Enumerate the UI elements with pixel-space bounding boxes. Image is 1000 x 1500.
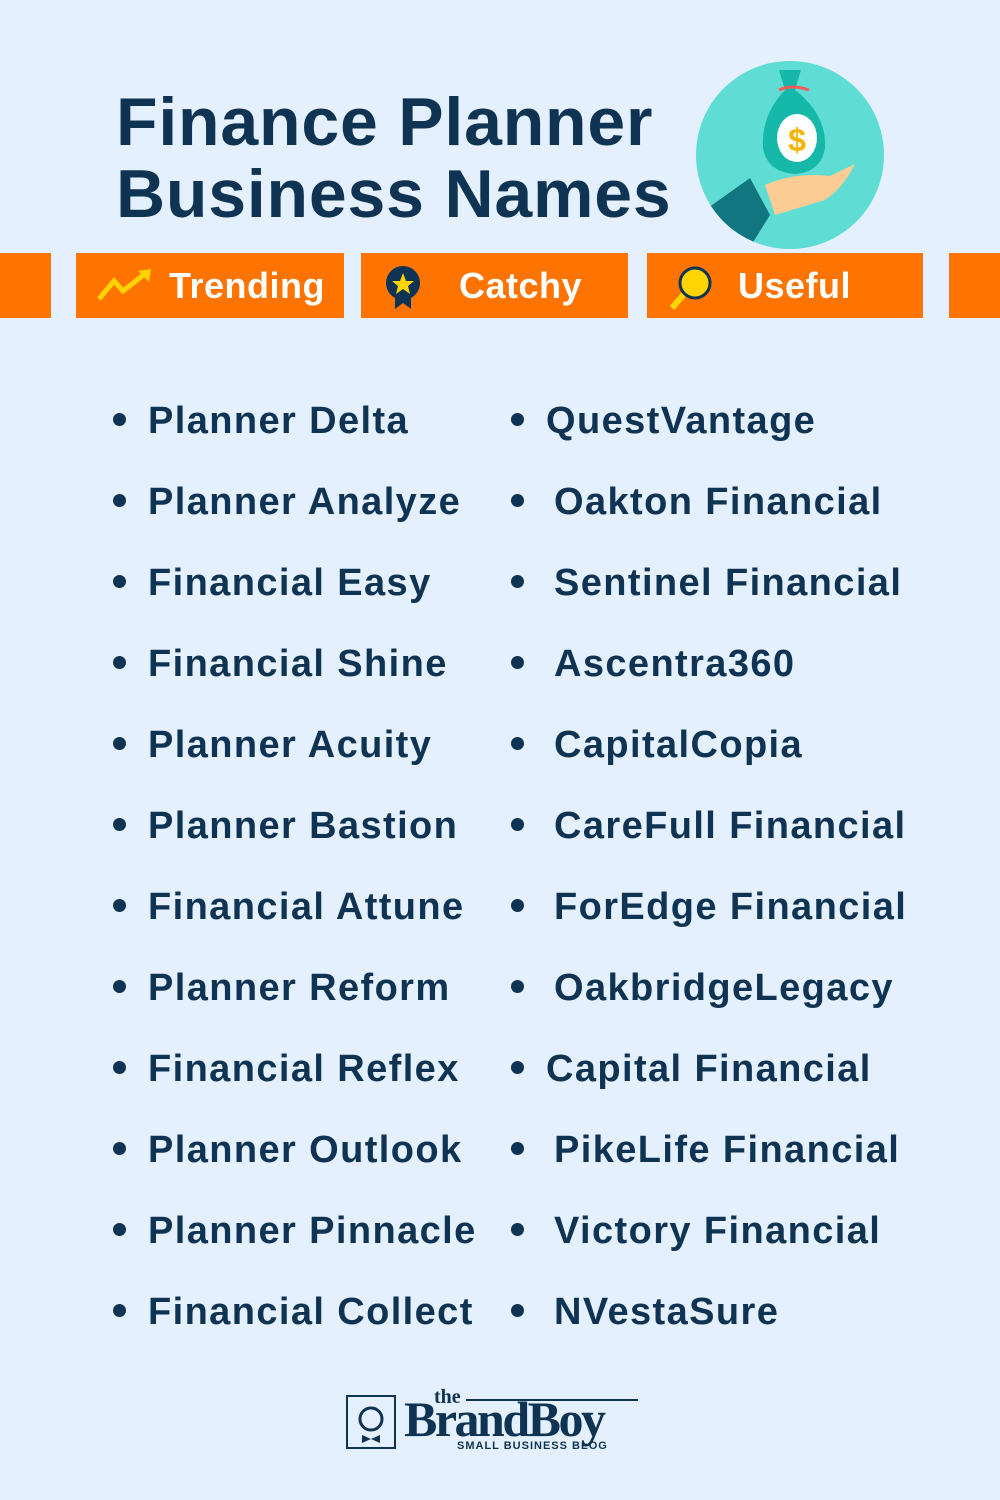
- tab: useful: Useful: [738, 265, 851, 306]
- list: left column: Planner Analyze: [148, 481, 461, 523]
- logo: the BrandBoy: the: [434, 1386, 461, 1408]
- list: left column: Planner Bastion: [148, 805, 458, 847]
- tab: useful: [647, 253, 923, 318]
- list: left column: Planner Acuity: [148, 724, 432, 766]
- list: right column: [511, 400, 907, 1333]
- list: left column: [113, 400, 477, 1333]
- list: left column: Planner Outlook: [148, 1129, 462, 1171]
- list: right column: ForEdge Financial: [554, 886, 907, 928]
- list: right column: QuestVantage: [546, 400, 816, 442]
- list: right column: NVestaSure: [554, 1291, 779, 1333]
- tab: catchy: [361, 253, 628, 318]
- tab: trending: [76, 253, 344, 318]
- title: Finance Planner: [116, 84, 653, 160]
- icon: money bag in hand: $: [788, 122, 806, 158]
- logo: the BrandBoy: [346, 1386, 638, 1452]
- list: left column: Financial Shine: [148, 643, 448, 685]
- list: left column: Financial Easy: [148, 562, 432, 604]
- list: right column: CapitalCopia: [554, 724, 803, 766]
- tab: right edge: [949, 253, 1000, 318]
- tab: left edge: [0, 253, 51, 318]
- list: right column: Ascentra360: [554, 643, 795, 685]
- list: right column: Victory Financial: [554, 1210, 881, 1252]
- list: left column: Planner Pinnacle: [148, 1210, 477, 1252]
- list: left column: Planner Delta: [148, 400, 409, 442]
- list: left column: Planner Reform: [148, 967, 451, 1009]
- list: right column: Capital Financial: [546, 1048, 872, 1090]
- list: left column: Financial Attune: [148, 886, 465, 928]
- tab: catchy: Catchy: [459, 265, 582, 306]
- list: right column: CareFull Financial: [554, 805, 907, 847]
- list: right column: OakbridgeLegacy: [554, 967, 894, 1009]
- logo: the BrandBoy: BrandBoy: [404, 1391, 604, 1447]
- title: Business Names: [116, 156, 671, 232]
- list: left column: Financial Reflex: [148, 1048, 460, 1090]
- list: left column: Financial Collect: [148, 1291, 474, 1333]
- list: right column: Sentinel Financial: [554, 562, 902, 604]
- icon: money bag in hand: [696, 61, 884, 249]
- tab: trending: Trending: [169, 265, 325, 306]
- list: right column: PikeLife Financial: [554, 1129, 900, 1171]
- title: [116, 84, 671, 232]
- list: right column: Oakton Financial: [554, 481, 883, 523]
- logo: the BrandBoy: SMALL BUSINESS BLOG: [457, 1440, 608, 1452]
